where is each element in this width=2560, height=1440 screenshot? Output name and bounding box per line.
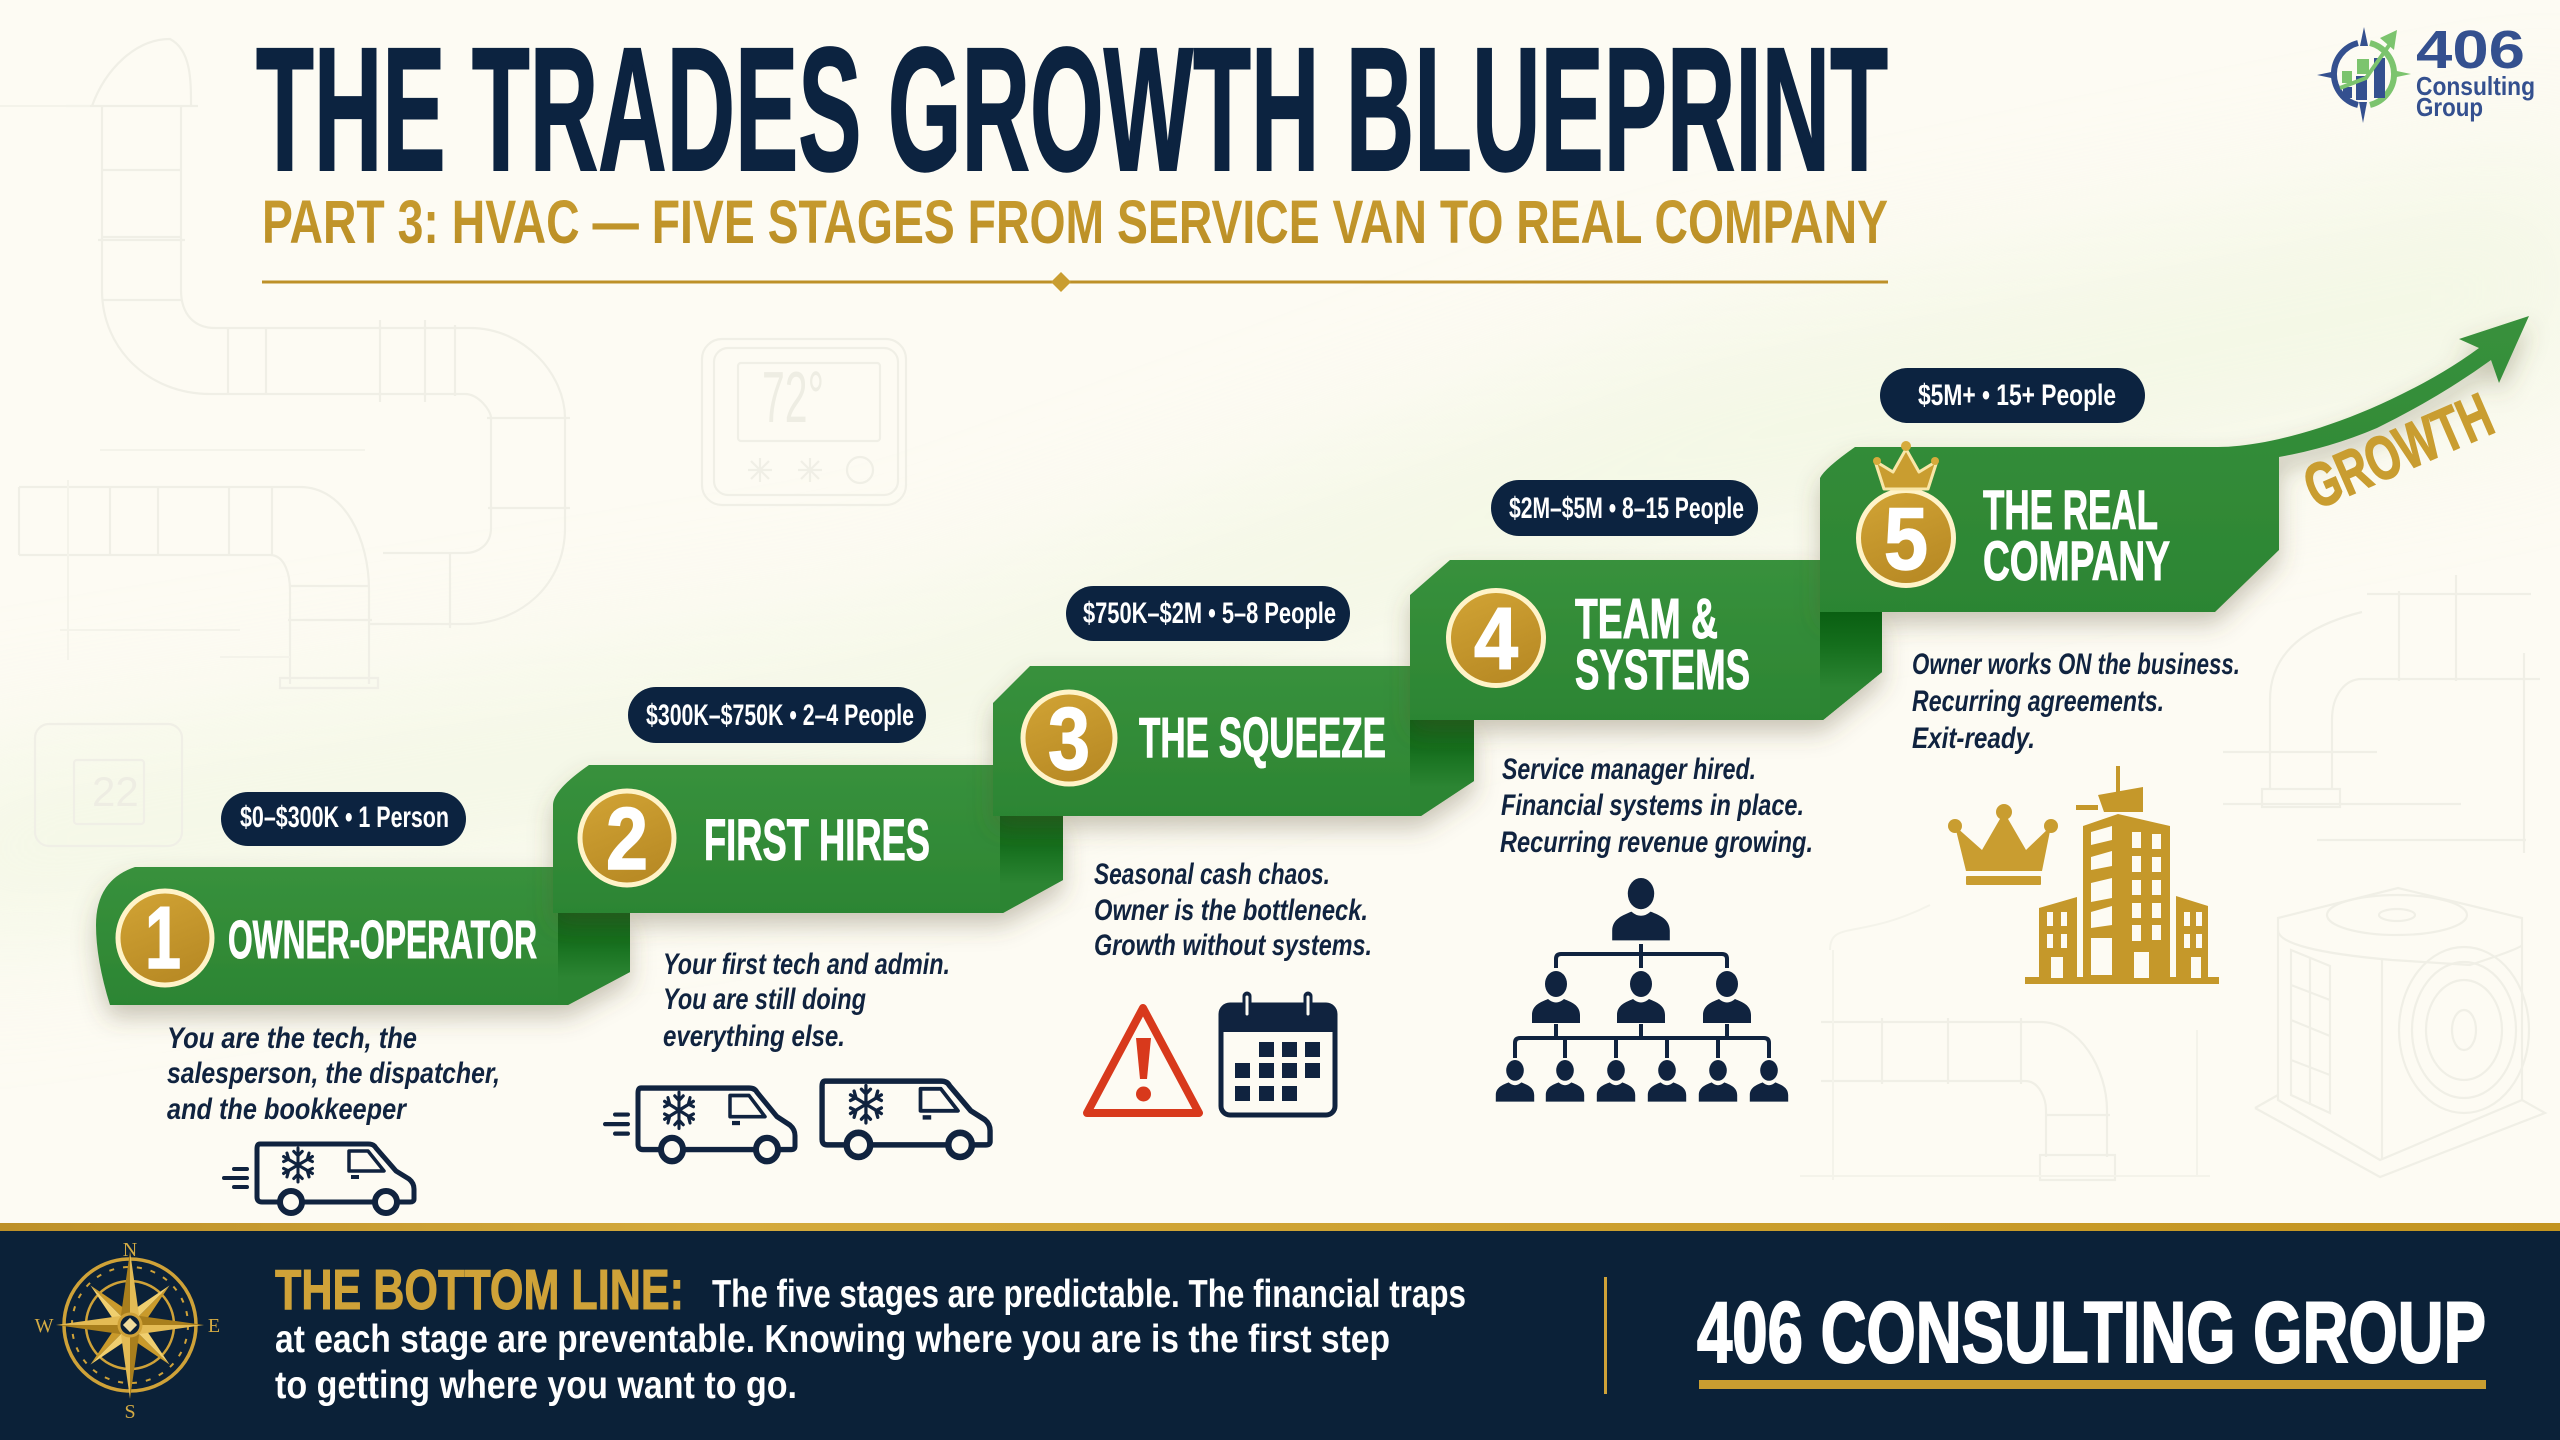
stage 2 revenue pill: $300K–$750K • 2–4 People	[646, 699, 914, 732]
bottom line body text: at each stage are preventable. Knowing where you are is the first step	[275, 1318, 1390, 1361]
stage 5 revenue pill	[1880, 368, 2145, 423]
stage 2 description	[663, 948, 950, 1053]
panel: stage 2	[553, 687, 1063, 1161]
stage 2 revenue pill	[628, 687, 926, 743]
icon: compass rose: N	[123, 1239, 137, 1261]
logo: 406 Consulting Group: Consulting	[2416, 71, 2535, 101]
icon: service van	[224, 1144, 414, 1213]
subtitle: PART 3: HVAC — FIVE STAGES FROM SERVICE VAN TO REAL COMPANY	[262, 188, 1888, 256]
stage 5 revenue pill: $5M+ • 15+ People	[1918, 379, 2116, 412]
stage 1 description: salesperson, the dispatcher,	[167, 1057, 500, 1090]
stage 1 label: OWNER-OPERATOR	[228, 910, 537, 970]
stage 5 badge with crown	[1858, 441, 1954, 588]
stage 5 badge with crown: 5	[1884, 489, 1928, 588]
stage 4 description: Financial systems in place.	[1501, 789, 1804, 822]
stage 3 description: Seasonal cash chaos.	[1094, 858, 1330, 891]
banner gold edge	[0, 1223, 2560, 1231]
icon: compass rose: S	[124, 1401, 136, 1423]
background: duct pipe, lower right	[1800, 905, 2210, 1180]
icon: organisation chart	[1496, 878, 1788, 1102]
stage 4 description: Service manager hired.	[1502, 753, 1756, 786]
icon: compass rose	[35, 1239, 220, 1423]
stage 3 badge	[1023, 689, 1115, 788]
stage 5 description: Exit-ready.	[1912, 722, 2035, 755]
icon: warning triangle	[1087, 1008, 1199, 1113]
icon: two service vans	[605, 1081, 990, 1161]
stage 1 revenue pill: $0–$300K • 1 Person	[240, 801, 449, 834]
stage 4 label: TEAM &	[1575, 587, 1718, 651]
stage 3 description: Owner is the bottleneck.	[1094, 894, 1368, 927]
stage 2 badge: 2	[606, 789, 648, 888]
banner background	[0, 1231, 2560, 1440]
icon: gold crown	[1948, 804, 2058, 885]
stage 1 badge	[118, 888, 212, 987]
stage 4 revenue pill: $2M–$5M • 8–15 People	[1509, 492, 1744, 525]
stage 5 label: COMPANY	[1983, 529, 2170, 592]
logo: 406 Consulting Group: Group	[2416, 92, 2483, 122]
stage 4 badge: 4	[1474, 589, 1518, 688]
background: thermostat, lower left	[35, 724, 182, 846]
stage 3 description: Growth without systems.	[1094, 929, 1372, 962]
icon: compass rose: W	[35, 1315, 54, 1337]
stage 4 description	[1500, 753, 1813, 859]
bottom line heading: THE BOTTOM LINE:	[275, 1258, 684, 1322]
stage 1 band	[96, 867, 630, 1005]
stage 2 description: everything else.	[663, 1020, 845, 1053]
stage 3 revenue pill: $750K–$2M • 5–8 People	[1083, 597, 1336, 630]
stage 4 description: Recurring revenue growing.	[1500, 826, 1813, 859]
background: AC condenser unit	[2255, 888, 2545, 1177]
logo wordmark: 406	[2416, 20, 2525, 80]
stage 1 description: You are the tech, the	[167, 1022, 417, 1055]
panel: stage 4	[1410, 480, 1882, 1102]
stage 4 revenue pill	[1491, 480, 1758, 536]
logo: 406 Consulting Group	[2317, 20, 2535, 123]
banner divider	[1604, 1277, 1607, 1394]
company name underline	[1699, 1380, 2486, 1389]
stage 3 revenue pill	[1066, 586, 1350, 641]
panel: stage 5	[1820, 316, 2529, 984]
panel: stage 1	[96, 792, 630, 1213]
stage 4 label	[1575, 587, 1750, 702]
stage 3 badge: 3	[1048, 689, 1090, 788]
bottom line body text: The five stages are predictable. The financial traps	[712, 1273, 1466, 1316]
icon: gold office buildings	[2025, 766, 2219, 984]
stage 1 description	[167, 1022, 500, 1126]
stage 5 label	[1983, 478, 2170, 592]
stage 5 description	[1912, 648, 2240, 755]
bottom line body text: to getting where you want to go.	[275, 1364, 797, 1407]
logo icon	[2317, 27, 2411, 123]
stage 1 description: and the bookkeeper	[167, 1093, 408, 1126]
background: duct drawing, right	[2223, 575, 2540, 853]
stage 2 description: Your first tech and admin.	[663, 948, 950, 981]
panel: stage 3	[993, 586, 1474, 1115]
stage 2 label: FIRST HIRES	[704, 808, 930, 873]
stage 4 band	[1410, 560, 1882, 720]
background: thermostat, lower left: 22	[92, 768, 139, 815]
icon: calendar	[1221, 996, 1335, 1115]
stage 1 badge: 1	[145, 888, 181, 987]
stage 3 description	[1094, 858, 1372, 962]
bottom line body text	[275, 1273, 1466, 1407]
stage 2 band	[553, 765, 1063, 913]
stage 1 revenue pill	[221, 792, 466, 846]
stage 2 badge	[580, 789, 674, 888]
stage 3 band	[993, 666, 1474, 816]
icon: compass rose: E	[208, 1315, 220, 1337]
background: thermostat, upper: 72°	[762, 358, 824, 438]
stage 4 label: SYSTEMS	[1575, 638, 1750, 702]
stage 2 description: You are still doing	[663, 983, 866, 1016]
stage 3 label: THE SQUEEZE	[1139, 706, 1386, 770]
stage 5 description: Recurring agreements.	[1912, 685, 2164, 718]
background: thermostat, upper	[702, 339, 906, 505]
stage 5 label: THE REAL	[1983, 478, 2158, 541]
stage 4 badge	[1448, 589, 1544, 688]
title rule with diamond	[262, 272, 1888, 292]
stage 5 band with growth arrow	[1820, 316, 2529, 720]
stage 5 description: Owner works ON the business.	[1912, 648, 2240, 681]
background: blueprint duct drawing, upper left	[0, 39, 570, 688]
panel: bottom line banner	[0, 1223, 2560, 1440]
